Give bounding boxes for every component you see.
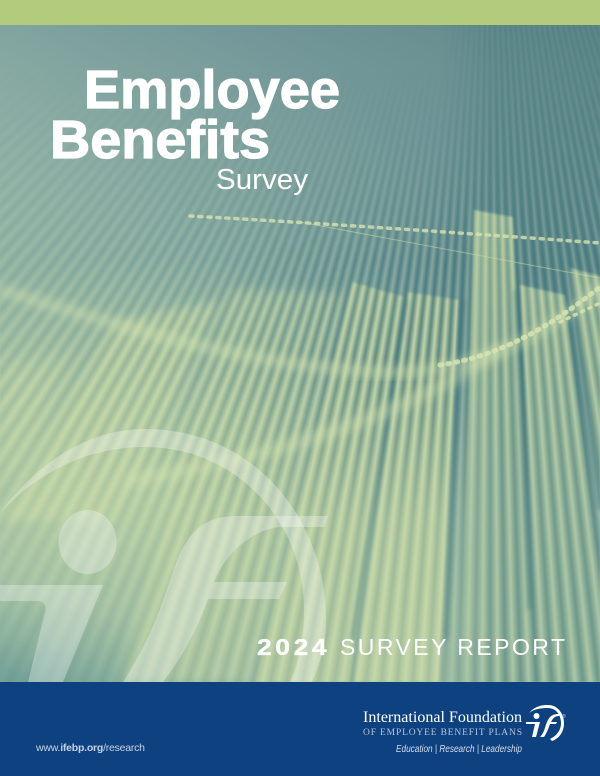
dotted line: top <box>190 216 600 243</box>
perspective stripes <box>0 116 600 682</box>
title: Employee <box>84 60 340 120</box>
dark gaps between bars <box>352 290 600 640</box>
dotted line: rising <box>440 287 600 365</box>
blurred curve: wide band <box>0 288 600 372</box>
organisation name: International Foundation <box>363 709 522 726</box>
title: Benefits <box>50 110 270 170</box>
short bar <box>520 285 600 682</box>
watermark i stem <box>0 585 103 682</box>
watermark i dot <box>58 510 116 574</box>
watermark f <box>123 516 328 682</box>
website url: www.ifebp.org/research <box>35 742 145 754</box>
dotted line: rising second <box>560 303 600 322</box>
tallest bar <box>459 210 534 682</box>
footer band <box>0 682 600 776</box>
logo: if mark <box>526 705 564 741</box>
report label: SURVEY REPORT <box>340 634 565 660</box>
top green band <box>0 0 600 25</box>
thin grid line <box>300 222 600 278</box>
right edge bar <box>570 268 600 682</box>
watermark ring <box>0 429 326 682</box>
organisation name <box>363 709 522 738</box>
registered mark: ® <box>562 713 566 720</box>
organisation name: OF EMPLOYEE BENEFIT PLANS <box>363 728 522 738</box>
title <box>50 60 340 196</box>
title: Survey <box>216 164 309 196</box>
stripes over right bars <box>456 25 600 682</box>
report label: 2024 <box>257 636 327 661</box>
blurred curve: lower band <box>130 350 500 480</box>
tagline: Education | Research | Leadership <box>396 743 522 755</box>
